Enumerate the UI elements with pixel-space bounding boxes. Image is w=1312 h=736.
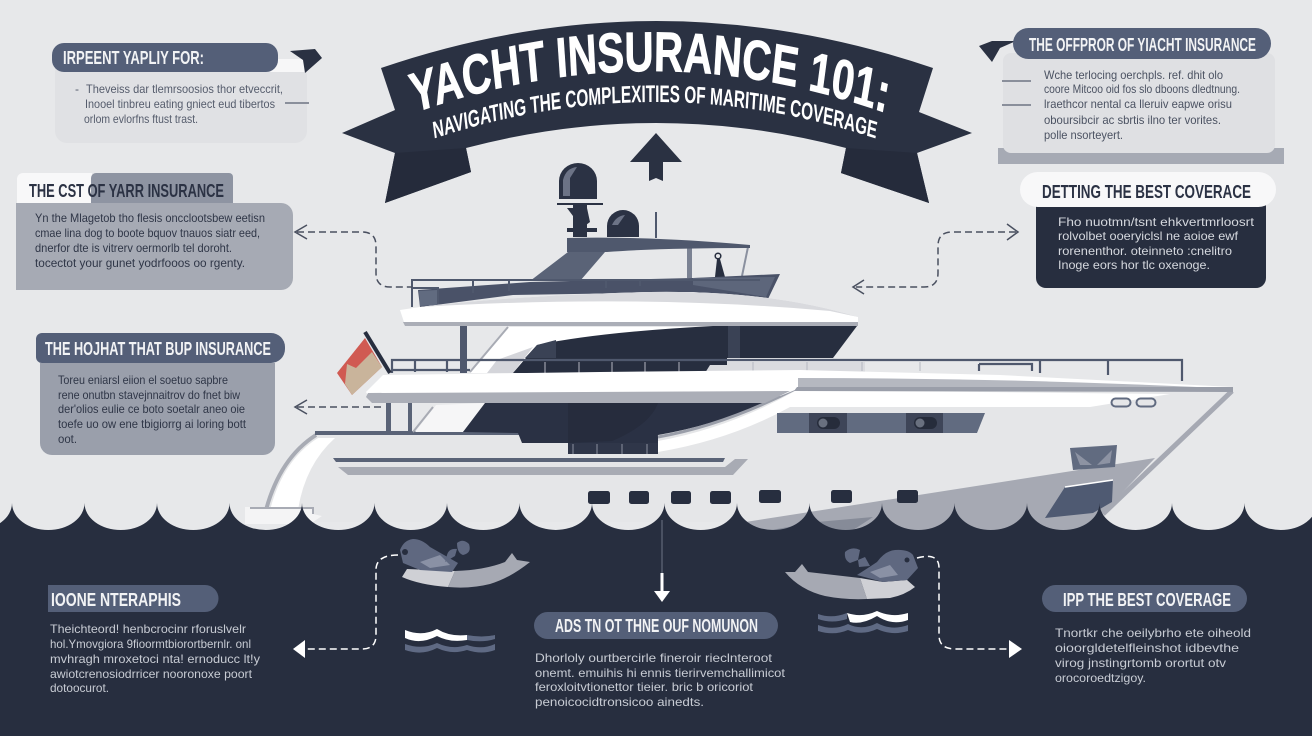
figure xyxy=(715,253,725,277)
water with scalloped waves xyxy=(0,503,1312,736)
arrow: left seal to bottom left panel xyxy=(293,555,398,658)
body text: onemt. emuihis hi ennis tierirvemchallimicot xyxy=(535,666,786,680)
heading xyxy=(534,612,778,639)
base strip xyxy=(998,148,1284,164)
body text: cmae lina dog to boote bquov tnauos siatr eed, xyxy=(35,226,260,240)
heading: THE CST OF YARR INSURANCE xyxy=(29,181,224,201)
bow line xyxy=(1103,391,1232,514)
body text: Toreu eniarsl eiion el soetuo sapbre xyxy=(58,373,228,387)
body text: Theichteord! henbcrocinr rforuslvelr xyxy=(50,622,246,636)
body text: dotoocurot. xyxy=(50,681,109,695)
icon: left waves xyxy=(405,629,495,653)
heading xyxy=(52,43,278,72)
panel: getting the best coverage xyxy=(1020,172,1276,288)
panel: what insurance covers xyxy=(36,333,285,455)
portholes xyxy=(588,490,918,504)
heading xyxy=(1042,585,1247,612)
flybridge xyxy=(418,274,780,307)
ribbon strip xyxy=(270,59,305,72)
arrow: right seal to bottom right panel xyxy=(917,556,1022,658)
window struts xyxy=(687,248,692,278)
hull xyxy=(262,388,1233,522)
title banner xyxy=(342,21,972,203)
body text xyxy=(1058,215,1255,272)
body text: Theveiss dar tlemrsoosios thor etveccrit, xyxy=(86,82,283,96)
icon: left seal xyxy=(400,539,530,588)
heading: IOONE NTERAPHIS xyxy=(51,590,181,610)
heading xyxy=(17,173,233,203)
body text: hol.Ymovgiora 9fioormtbiorortbernlr. onl xyxy=(50,637,251,651)
body text: lraethcor nental ca lleruiv eapwe orisu xyxy=(1044,97,1232,111)
body text: oioorgldetelfleinshot idbevthe xyxy=(1055,641,1239,655)
icon: pennant xyxy=(979,41,1016,62)
body text: penoicocidtronsicoo ainedts. xyxy=(535,695,704,709)
stern curve xyxy=(266,435,316,510)
body text: tocectot your gunet yodrfooos oo rgenty. xyxy=(35,256,245,270)
body text: - xyxy=(75,82,79,96)
lower deck windows xyxy=(463,403,765,454)
body text: Dhorloly ourtbercirle fineroir rieclnteroot xyxy=(535,651,773,665)
radome small xyxy=(607,210,639,237)
panel: top left xyxy=(52,43,322,143)
mid post xyxy=(460,323,467,373)
arrow: up xyxy=(630,133,682,181)
body text: der'olios eulie ce boto soetalr aneo oie xyxy=(58,402,245,416)
body text xyxy=(1044,68,1240,142)
panel: offering of yacht insurance xyxy=(979,28,1284,164)
heading xyxy=(36,333,285,363)
body text: rolvolbet ooeryiclsl ne aoioe ewf xyxy=(1058,229,1239,243)
icon: right waves xyxy=(818,611,908,633)
body text xyxy=(35,211,265,270)
deck supports xyxy=(386,402,412,433)
body text: feroxloitvtionettor tieier. bric b oricoriot xyxy=(535,680,754,694)
windshield xyxy=(530,252,605,281)
radome large xyxy=(559,163,597,199)
body text: Inoge eors hor tlc oxenoge. xyxy=(1058,258,1210,272)
stern deck line xyxy=(315,431,519,435)
body text xyxy=(50,622,260,695)
body text: oboursibcir ac sbrtis ilno ter vorites. xyxy=(1044,113,1221,127)
heading: IRPEENT YAPLIY FOR: xyxy=(63,48,204,68)
arrow: cost panel to yacht xyxy=(295,225,412,287)
panel: cost of insurance xyxy=(16,173,293,290)
body text xyxy=(1055,626,1251,685)
body text: Wche terlocing oerchpls. ref. dhit olo xyxy=(1044,68,1223,82)
body text: Fho nuotmn/tsnt ehkvertmrloosrt xyxy=(1058,215,1255,229)
vents xyxy=(1112,398,1130,406)
lower hull shadow xyxy=(720,458,1155,532)
heading: THE HOJHAT THAT BUP INSURANCE xyxy=(45,339,271,359)
antenna xyxy=(655,212,657,238)
white swoosh xyxy=(658,390,1170,452)
title text: YACHT INSURANCE 101: xyxy=(407,32,888,112)
heading xyxy=(1020,172,1276,207)
body text: orocoroedtzigoy. xyxy=(1055,671,1146,685)
upper rail xyxy=(412,280,760,307)
body text xyxy=(535,651,786,709)
icon: pennant xyxy=(290,49,322,73)
panel: bottom center xyxy=(534,612,786,709)
body text xyxy=(58,373,247,446)
body text: Tnortkr che oeilybrho ete oiheold xyxy=(1055,626,1251,640)
side deck strip xyxy=(705,362,865,372)
anchor plate xyxy=(1070,445,1117,470)
arrow: coverage panel to yacht xyxy=(295,400,384,414)
mast xyxy=(557,203,603,237)
body text: mvhragh mroxetoci nta! ernoducc lt!y xyxy=(50,652,260,666)
body text: Inooel tinbreu eating gniect eud tibertos xyxy=(85,97,275,111)
body text: dnerfor dte is vitrerv oermorlb tel doroht. xyxy=(35,241,232,255)
body text xyxy=(75,82,283,126)
heading xyxy=(1013,28,1271,59)
flag xyxy=(337,332,390,395)
icon: right seal xyxy=(785,548,918,599)
body text: orlom evlorfns ftust trast. xyxy=(84,112,198,126)
body text: oot. xyxy=(58,432,77,446)
arrow: best coverage panel to yacht xyxy=(853,224,1018,294)
upper slab xyxy=(400,292,858,325)
body text: virog jnstingrtomb orortut otv xyxy=(1055,656,1226,670)
body text: rorenenthor. oteinneto :cnelitro xyxy=(1058,244,1232,258)
swim platform xyxy=(245,507,322,524)
heading: IPP THE BEST COVERAGE xyxy=(1063,590,1231,610)
body text: polle nsorteyert. xyxy=(1044,128,1123,142)
side panel xyxy=(777,413,985,433)
panel: bottom left xyxy=(48,585,260,695)
hull lines xyxy=(333,458,725,462)
subtitle text: NAVIGATING THE COMPLEXITIES OF MARITIME COVERAGE xyxy=(432,85,878,138)
hard top xyxy=(567,238,750,252)
body text: coore Mitcoo oid fos slo dboons dledtnung. xyxy=(1044,82,1240,96)
body text: toefe uo ow ene tbigiorrg ai loring bott xyxy=(58,417,247,431)
main deck slab xyxy=(366,370,1233,402)
arrow: down xyxy=(654,520,670,602)
upper deck windows xyxy=(513,326,857,373)
mid rail xyxy=(392,360,1182,381)
panel: bottom right xyxy=(1042,585,1251,685)
body text: rene onutbn stavejnnaitrov do fnet biw xyxy=(58,388,240,402)
upper deck wall xyxy=(470,327,720,373)
yacht illustration xyxy=(245,163,1233,532)
body text: awiotcrenosiodrricer nooronoxe poort xyxy=(50,667,253,681)
body text: Yn the Mlagetob tho flesis oncclootsbew eetisn xyxy=(35,211,265,225)
heading: ADS TN OT THNE OUF NOMUNON xyxy=(555,616,758,636)
